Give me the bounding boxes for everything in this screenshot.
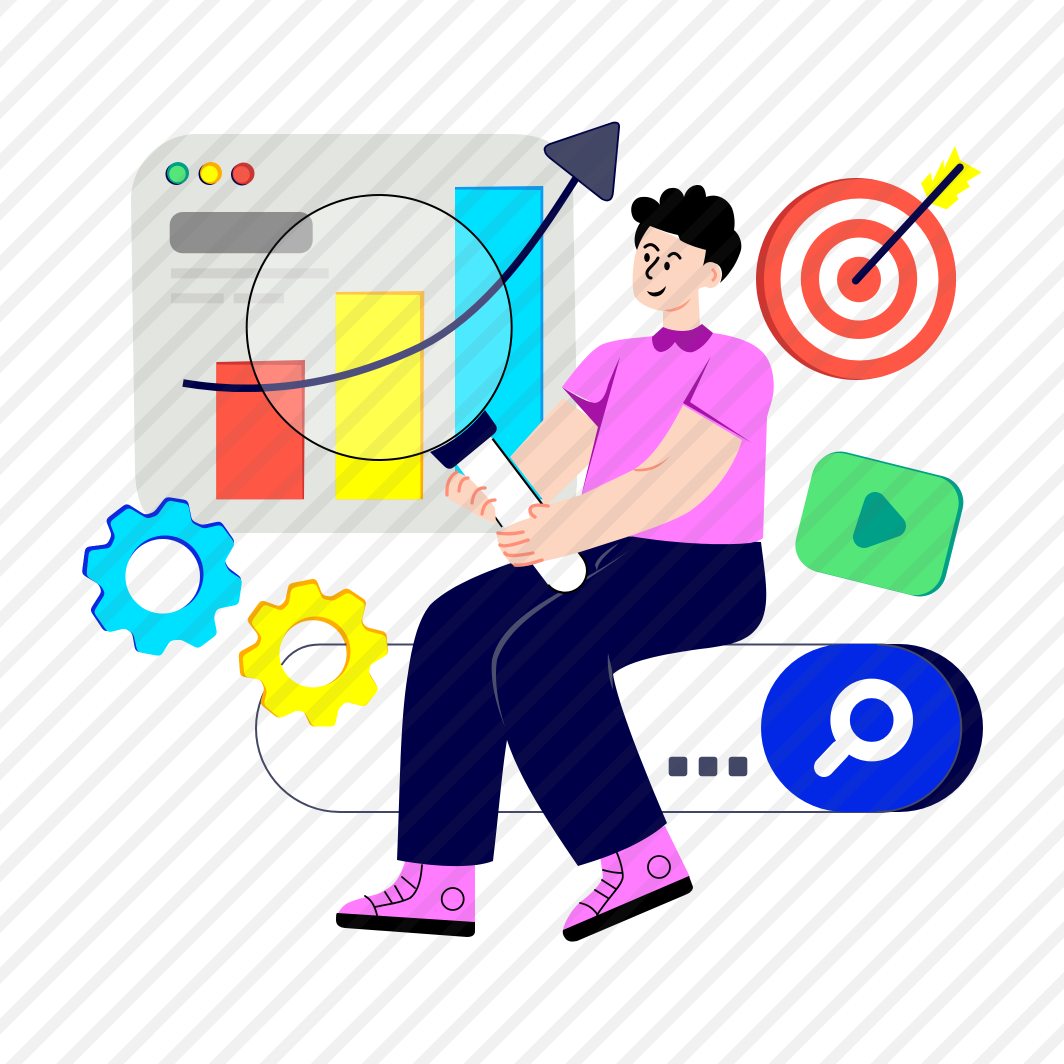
target rings	[764, 179, 956, 379]
panel: browser window	[131, 134, 577, 533]
icon: play triangle	[864, 503, 895, 537]
neck	[663, 285, 700, 332]
ear	[700, 262, 721, 288]
neck shadow	[664, 298, 691, 312]
search button	[761, 644, 961, 812]
arrowhead	[545, 123, 619, 200]
search button shadow	[790, 644, 983, 812]
icon: magnifier	[824, 688, 903, 767]
elbow crease	[633, 456, 670, 471]
magnifying glass collar	[430, 410, 497, 469]
head	[631, 185, 741, 312]
person	[336, 185, 774, 942]
far arm	[510, 398, 600, 505]
search bar	[256, 644, 983, 812]
left shoe	[336, 860, 475, 937]
play button card	[790, 446, 969, 602]
collar	[652, 324, 713, 352]
button outline	[877, 644, 961, 812]
fingers	[498, 505, 548, 565]
hair	[631, 185, 741, 283]
cyan bar	[455, 186, 543, 499]
magnifying glass handle	[475, 439, 587, 593]
target side	[756, 178, 956, 380]
right shoe	[563, 826, 693, 942]
trouser creases	[492, 543, 631, 727]
near hand on handle	[445, 472, 496, 523]
bar chart	[216, 186, 543, 499]
dart fletching	[921, 146, 982, 209]
ellipsis dots	[669, 757, 747, 776]
icon: yellow gear	[240, 580, 387, 725]
magnifying glass lens	[247, 195, 512, 460]
bar outline through gear hole	[282, 644, 346, 665]
growth curve	[183, 175, 578, 388]
target	[756, 146, 982, 380]
sleeve fold	[562, 357, 620, 497]
search bar outline	[256, 644, 962, 812]
shoulder fold	[683, 356, 752, 443]
icon: blue gear	[83, 498, 241, 655]
yellow bar	[336, 291, 424, 499]
dart shaft	[856, 167, 960, 281]
window title pill	[170, 212, 313, 253]
near arm and hand	[497, 405, 742, 567]
shirt	[562, 333, 774, 544]
window text lines	[171, 268, 329, 303]
window control dots	[166, 162, 254, 186]
face	[644, 245, 680, 296]
red bar	[216, 360, 305, 499]
trousers	[397, 536, 766, 866]
